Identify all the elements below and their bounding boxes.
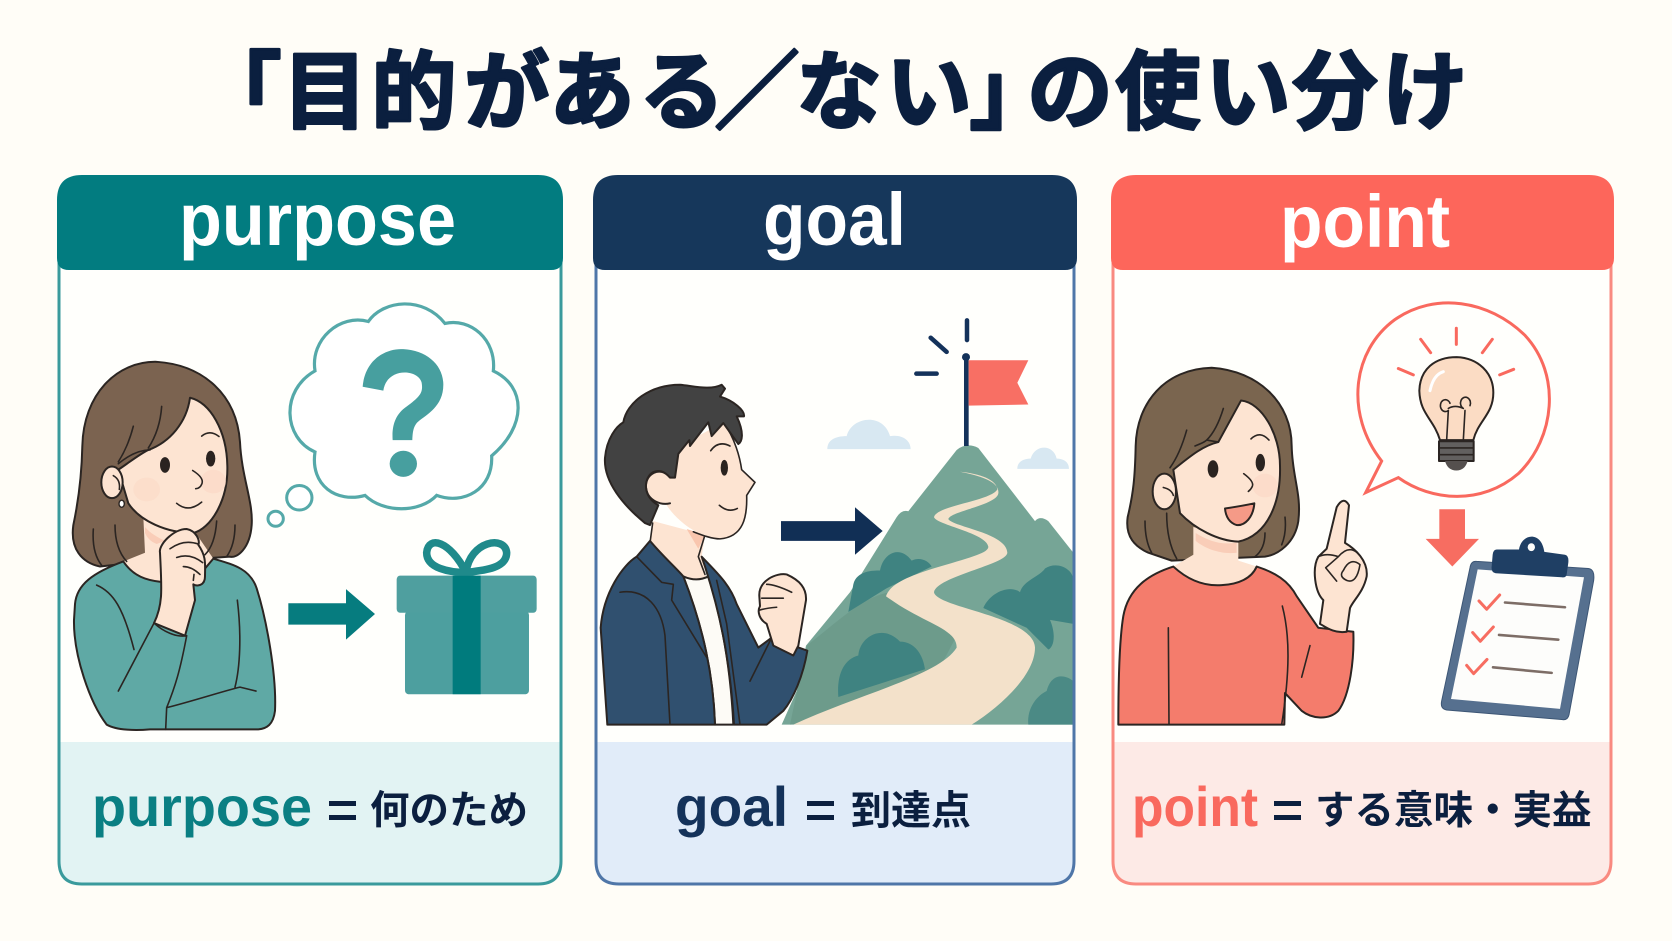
- panel: goal: [593, 175, 1077, 885]
- heading: goal: goal: [763, 178, 906, 261]
- thought bubble with question mark: [268, 304, 518, 526]
- caption: point: point: [1132, 775, 1258, 838]
- caption background: goal: [597, 742, 1073, 883]
- caption: purpose: purpose: [92, 775, 312, 838]
- caption background: point: [1114, 742, 1610, 883]
- caption: point: [1132, 775, 1592, 838]
- heading: point: point: [1280, 180, 1450, 263]
- caption: purpose: 何のため: [370, 789, 528, 833]
- title: 「目的がある／ない」の使い分け: [196, 46, 1468, 141]
- icon: clipboard checklist: [1441, 537, 1594, 720]
- card body: goal: [595, 190, 1075, 885]
- caption: purpose: [92, 775, 528, 838]
- caption background: purpose: [60, 742, 560, 883]
- arrow: to gift: [288, 589, 375, 640]
- illustration: woman thinking: [73, 362, 275, 730]
- caption: goal: 到達点: [851, 789, 971, 833]
- caption: goal: [675, 775, 971, 838]
- caption: goal: goal: [675, 775, 788, 838]
- card body: purpose: [58, 190, 562, 885]
- illustration: woman pointing: [1118, 368, 1367, 725]
- arrow: to mountain: [781, 507, 883, 555]
- header: purpose: [57, 175, 563, 270]
- speech bubble with light bulb: [1358, 303, 1549, 496]
- arrow: down to clipboard: [1426, 509, 1479, 567]
- header: point: [1111, 175, 1614, 270]
- icon: flag on summit: [916, 320, 1028, 446]
- illustration: mountain with road: [782, 420, 1073, 725]
- heading: purpose: purpose: [179, 178, 456, 261]
- panel: point: [1111, 175, 1614, 885]
- icon: gift box: [397, 543, 537, 694]
- card body: point: [1112, 190, 1612, 885]
- panel: purpose: [57, 175, 563, 885]
- illustration: man looking at goal: [601, 385, 807, 725]
- header: goal: [593, 175, 1077, 270]
- caption: point: する意味・実益: [1315, 789, 1592, 833]
